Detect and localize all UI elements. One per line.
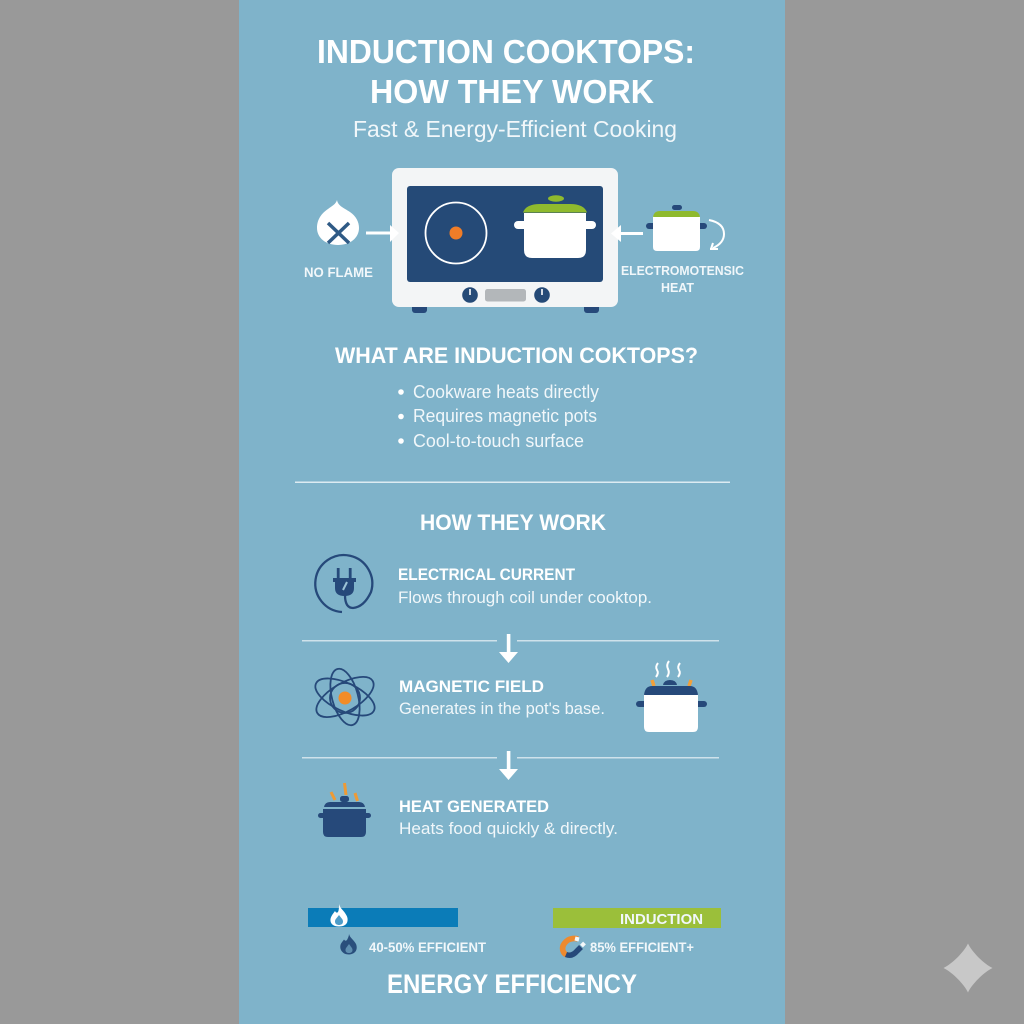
icon: magnet [563, 938, 584, 955]
title [317, 33, 695, 110]
gas efficiency value: 40-50% EFFICIENT [369, 939, 486, 955]
step 1: electrical current [315, 555, 652, 612]
title: INDUCTION COOKTOPS: [317, 33, 695, 70]
icon: white flame [330, 904, 348, 926]
main blue panel [239, 0, 785, 1024]
subtitle: Fast & Energy-Efficient Cooking [353, 116, 677, 142]
label: electromotensic heat [621, 263, 745, 295]
control knobs and display [462, 287, 550, 303]
icon: sparkle watermark [944, 944, 992, 992]
gas efficiency bar [308, 904, 458, 927]
bullet list: Cool-to-touch surface [413, 431, 584, 451]
step 2 text: Generates in the pot's base. [399, 699, 605, 718]
gas efficiency value [340, 934, 486, 955]
step 3 text [399, 797, 618, 838]
step 2 text [399, 677, 605, 718]
induction efficiency bar [553, 908, 721, 928]
heading: what are induction cooktops: WHAT ARE INDUCTION COKTOPS? [335, 343, 698, 368]
step 3 text: HEAT GENERATED [399, 797, 549, 816]
bullet list [398, 382, 599, 451]
bullet list: Requires magnetic pots [413, 406, 597, 426]
arrow: heat to cooktop [611, 225, 643, 242]
burner ring [426, 202, 486, 264]
heading: how they work: HOW THEY WORK [420, 510, 606, 535]
icon: no flame [317, 200, 359, 245]
step 3: heat generated [318, 783, 618, 838]
step 3 text: Heats food quickly & directly. [399, 819, 618, 838]
label: electromotensic heat: ELECTROMOTENSIC [621, 263, 745, 278]
step 1 text: ELECTRICAL CURRENT [398, 565, 576, 584]
induction efficiency value: 85% EFFICIENT+ [590, 939, 694, 955]
icon: navy pot with heat [318, 783, 371, 837]
icon: steaming pot [636, 661, 707, 732]
step 2 text: MAGNETIC FIELD [399, 677, 544, 696]
icon: navy flame [340, 934, 357, 954]
arrow: step 2 to step 3 [499, 751, 518, 780]
step 2: magnetic field [310, 661, 707, 732]
footer heading: energy efficiency: ENERGY EFFICIENCY [387, 969, 637, 999]
label: no flame: NO FLAME [304, 264, 373, 280]
step 1 text [398, 565, 652, 607]
induction efficiency bar: INDUCTION [620, 911, 703, 928]
pot on cooktop [514, 195, 596, 258]
arrow: no flame to cooktop [366, 225, 399, 242]
arrow: step 1 to step 2 [499, 634, 518, 663]
bullet list: Cookware heats directly [413, 382, 599, 402]
step 1 text: Flows through coil under cooktop. [398, 588, 652, 607]
icon: plug [315, 555, 372, 612]
label: electromotensic heat: HEAT [661, 280, 694, 295]
icon: atom magnetic field [310, 666, 380, 728]
cooktop illustration [392, 168, 618, 313]
title: HOW THEY WORK [370, 73, 654, 110]
icon: small pot with curved arrow [646, 205, 724, 251]
